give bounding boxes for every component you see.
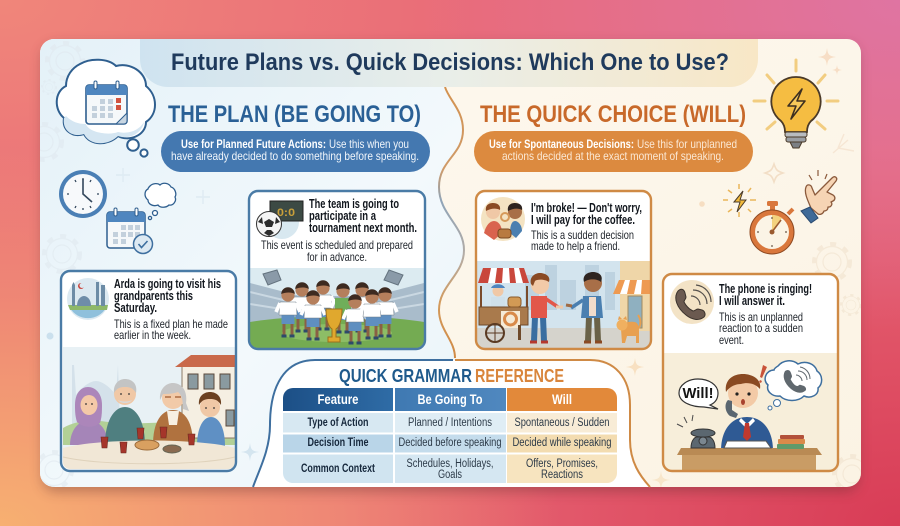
panel: coffee offer example: This is a sudden decision — [531, 228, 634, 242]
street vendor scene illustration — [477, 261, 650, 348]
grammar heading: REFERENCE — [475, 366, 564, 386]
icon: Istanbul skyline — [67, 278, 109, 320]
grammar table: Type of Action — [308, 417, 368, 429]
grammar table: Goals — [438, 469, 462, 481]
grammar table: Planned / Intentions — [408, 417, 492, 429]
pill: planned future actions — [161, 131, 430, 172]
grammar table: Be Going To — [418, 391, 482, 407]
panel: phone ringing example: reaction to a sudden — [719, 321, 803, 335]
panel: team tournament example: This event is scheduled and prepared — [261, 238, 413, 252]
grammar table: Decided while speaking — [512, 437, 612, 449]
panel: phone ringing example: event. — [719, 333, 744, 347]
pill: spontaneous decisions: Use this for unplanned — [637, 137, 737, 151]
panel: coffee offer example: I'm broke! — Don't worry, — [531, 201, 642, 215]
family scene illustration — [63, 347, 235, 469]
icon: light bulb — [754, 60, 838, 148]
panel: phone ringing example — [663, 274, 838, 471]
pill: spontaneous decisions: Use for Spontaneous Decisions: — [489, 137, 634, 151]
panel: Arda family visit example: Saturday. — [114, 301, 157, 315]
grammar table: Decision Time — [308, 437, 368, 449]
title: Future Plans vs. Quick Decisions: Which One to Use? — [171, 49, 729, 76]
panel: quick grammar reference — [252, 360, 650, 487]
panel: Arda family visit example: This is a fixed plan he made — [114, 317, 228, 331]
grammar table: Decided before speaking — [398, 437, 502, 449]
icon: stopwatch — [750, 201, 794, 254]
team scene illustration — [250, 268, 424, 348]
pill: planned future actions: have already decided to do something before speaking. — [171, 149, 419, 163]
grammar table: Reactions — [541, 469, 583, 481]
icon: phone with signal waves — [670, 280, 714, 324]
grammar table: Offers, Promises, — [526, 458, 598, 470]
icon: snapping hand — [801, 170, 837, 223]
panel: Arda family visit example: Arda is going to visit his — [114, 277, 221, 291]
panel: team tournament example: The team is going to — [309, 197, 399, 211]
panel: team tournament example: for in advance. — [307, 250, 367, 264]
panel: team tournament example — [249, 191, 425, 349]
grammar heading: QUICK GRAMMAR — [339, 366, 472, 386]
pill: spontaneous decisions — [474, 131, 753, 172]
grammar table: Will — [552, 391, 572, 407]
main card — [40, 39, 861, 492]
grammar table: Spontaneous / Sudden — [514, 417, 610, 429]
title banner — [140, 39, 758, 87]
icon: thought cloud with calendar — [57, 60, 155, 157]
thought cloud with phone — [765, 361, 822, 410]
panel: phone ringing example: I will answer it. — [719, 294, 785, 308]
icon: football and scoreboard — [256, 201, 303, 239]
office desk scene illustration — [664, 353, 837, 470]
grammar table: Common Context — [301, 463, 375, 475]
panel: Arda family visit example: earlier in the week. — [114, 328, 191, 342]
wavy divider — [439, 87, 464, 358]
icon: two friends with donuts — [481, 197, 525, 241]
pill: planned future actions: Use this when you — [329, 137, 409, 151]
panel: coffee offer example: I will pay for the coffee. — [531, 213, 635, 227]
panel: coffee offer example — [476, 191, 651, 349]
icon: lightning spark — [723, 184, 756, 217]
speech bubble: Will! — [679, 379, 718, 409]
pill: planned future actions: Use for Planned Future Actions: — [181, 137, 326, 151]
panel: Arda family visit example — [61, 271, 236, 471]
grammar table — [283, 388, 617, 483]
icon: wall clock — [59, 170, 107, 218]
panel: phone ringing example: The phone is ringing! — [719, 282, 812, 296]
panel: phone ringing example: This is an unplanned — [719, 310, 803, 324]
grammar table: Schedules, Holidays, — [406, 458, 494, 470]
heading: the plan: THE PLAN (BE GOING TO) — [168, 101, 421, 128]
panel: team tournament example: participate in a — [309, 209, 377, 223]
heading: the quick choice: THE QUICK CHOICE (WILL) — [480, 101, 746, 128]
icon: calendar with check — [107, 208, 152, 254]
grammar table: Feature — [318, 391, 359, 407]
speech bubble: Will!: Will! — [682, 386, 714, 402]
panel: team tournament example: tournament next month. — [309, 221, 417, 235]
pill: spontaneous decisions: actions decided at the exact moment of speaking. — [502, 149, 724, 163]
icon: football and scoreboard: 0:0 — [277, 207, 295, 219]
panel: Arda family visit example: grandparents this — [114, 289, 193, 303]
panel: coffee offer example: made to help a friend. — [531, 239, 620, 253]
icon: small thought cloud — [145, 183, 176, 220]
